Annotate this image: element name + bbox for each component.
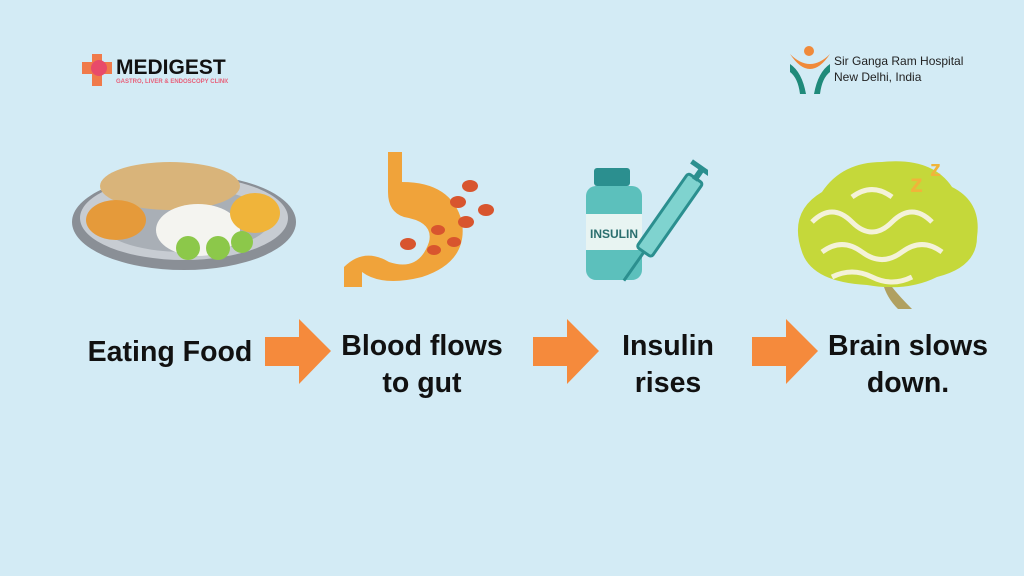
text: Insulin rises: Insulin [622, 330, 714, 362]
logo: Sir Ganga Ram Hospital: Sir Ganga Ram Hospital [834, 54, 963, 68]
text: Insulin rises [622, 330, 714, 399]
arrow 2 [533, 319, 599, 384]
text: Blood flows to gut: Blood flows [341, 330, 503, 362]
icon: brain: z [910, 168, 923, 198]
logo: Medigest: MEDIGEST [116, 56, 226, 79]
text: Eating Food: Eating Food [88, 336, 252, 368]
text: Brain slows down: Brain slows [828, 330, 988, 362]
logo: Medigest: GASTRO, LIVER & ENDOSCOPY CLINIC [116, 79, 228, 85]
logo: Sir Ganga Ram Hospital: New Delhi, India [834, 70, 922, 84]
text: Brain slows down: down. [867, 367, 949, 399]
logo: Sir Ganga Ram Hospital [790, 46, 963, 94]
arrow 3 [752, 319, 818, 384]
icon: brain: z [930, 156, 941, 181]
icon: stomach [344, 152, 494, 287]
text: Insulin rises: rises [635, 367, 701, 399]
text: Brain slows down [828, 330, 988, 399]
icon: insulin vial and syringe [586, 160, 708, 282]
text: Blood flows to gut [341, 330, 503, 399]
text: Blood flows to gut: to gut [382, 367, 462, 399]
logo: Medigest [82, 54, 228, 86]
icon: insulin vial and syringe: INSULIN [590, 227, 638, 241]
arrow 1 [265, 319, 331, 384]
icon: brain [798, 156, 978, 309]
icon: plate of food [72, 162, 296, 270]
